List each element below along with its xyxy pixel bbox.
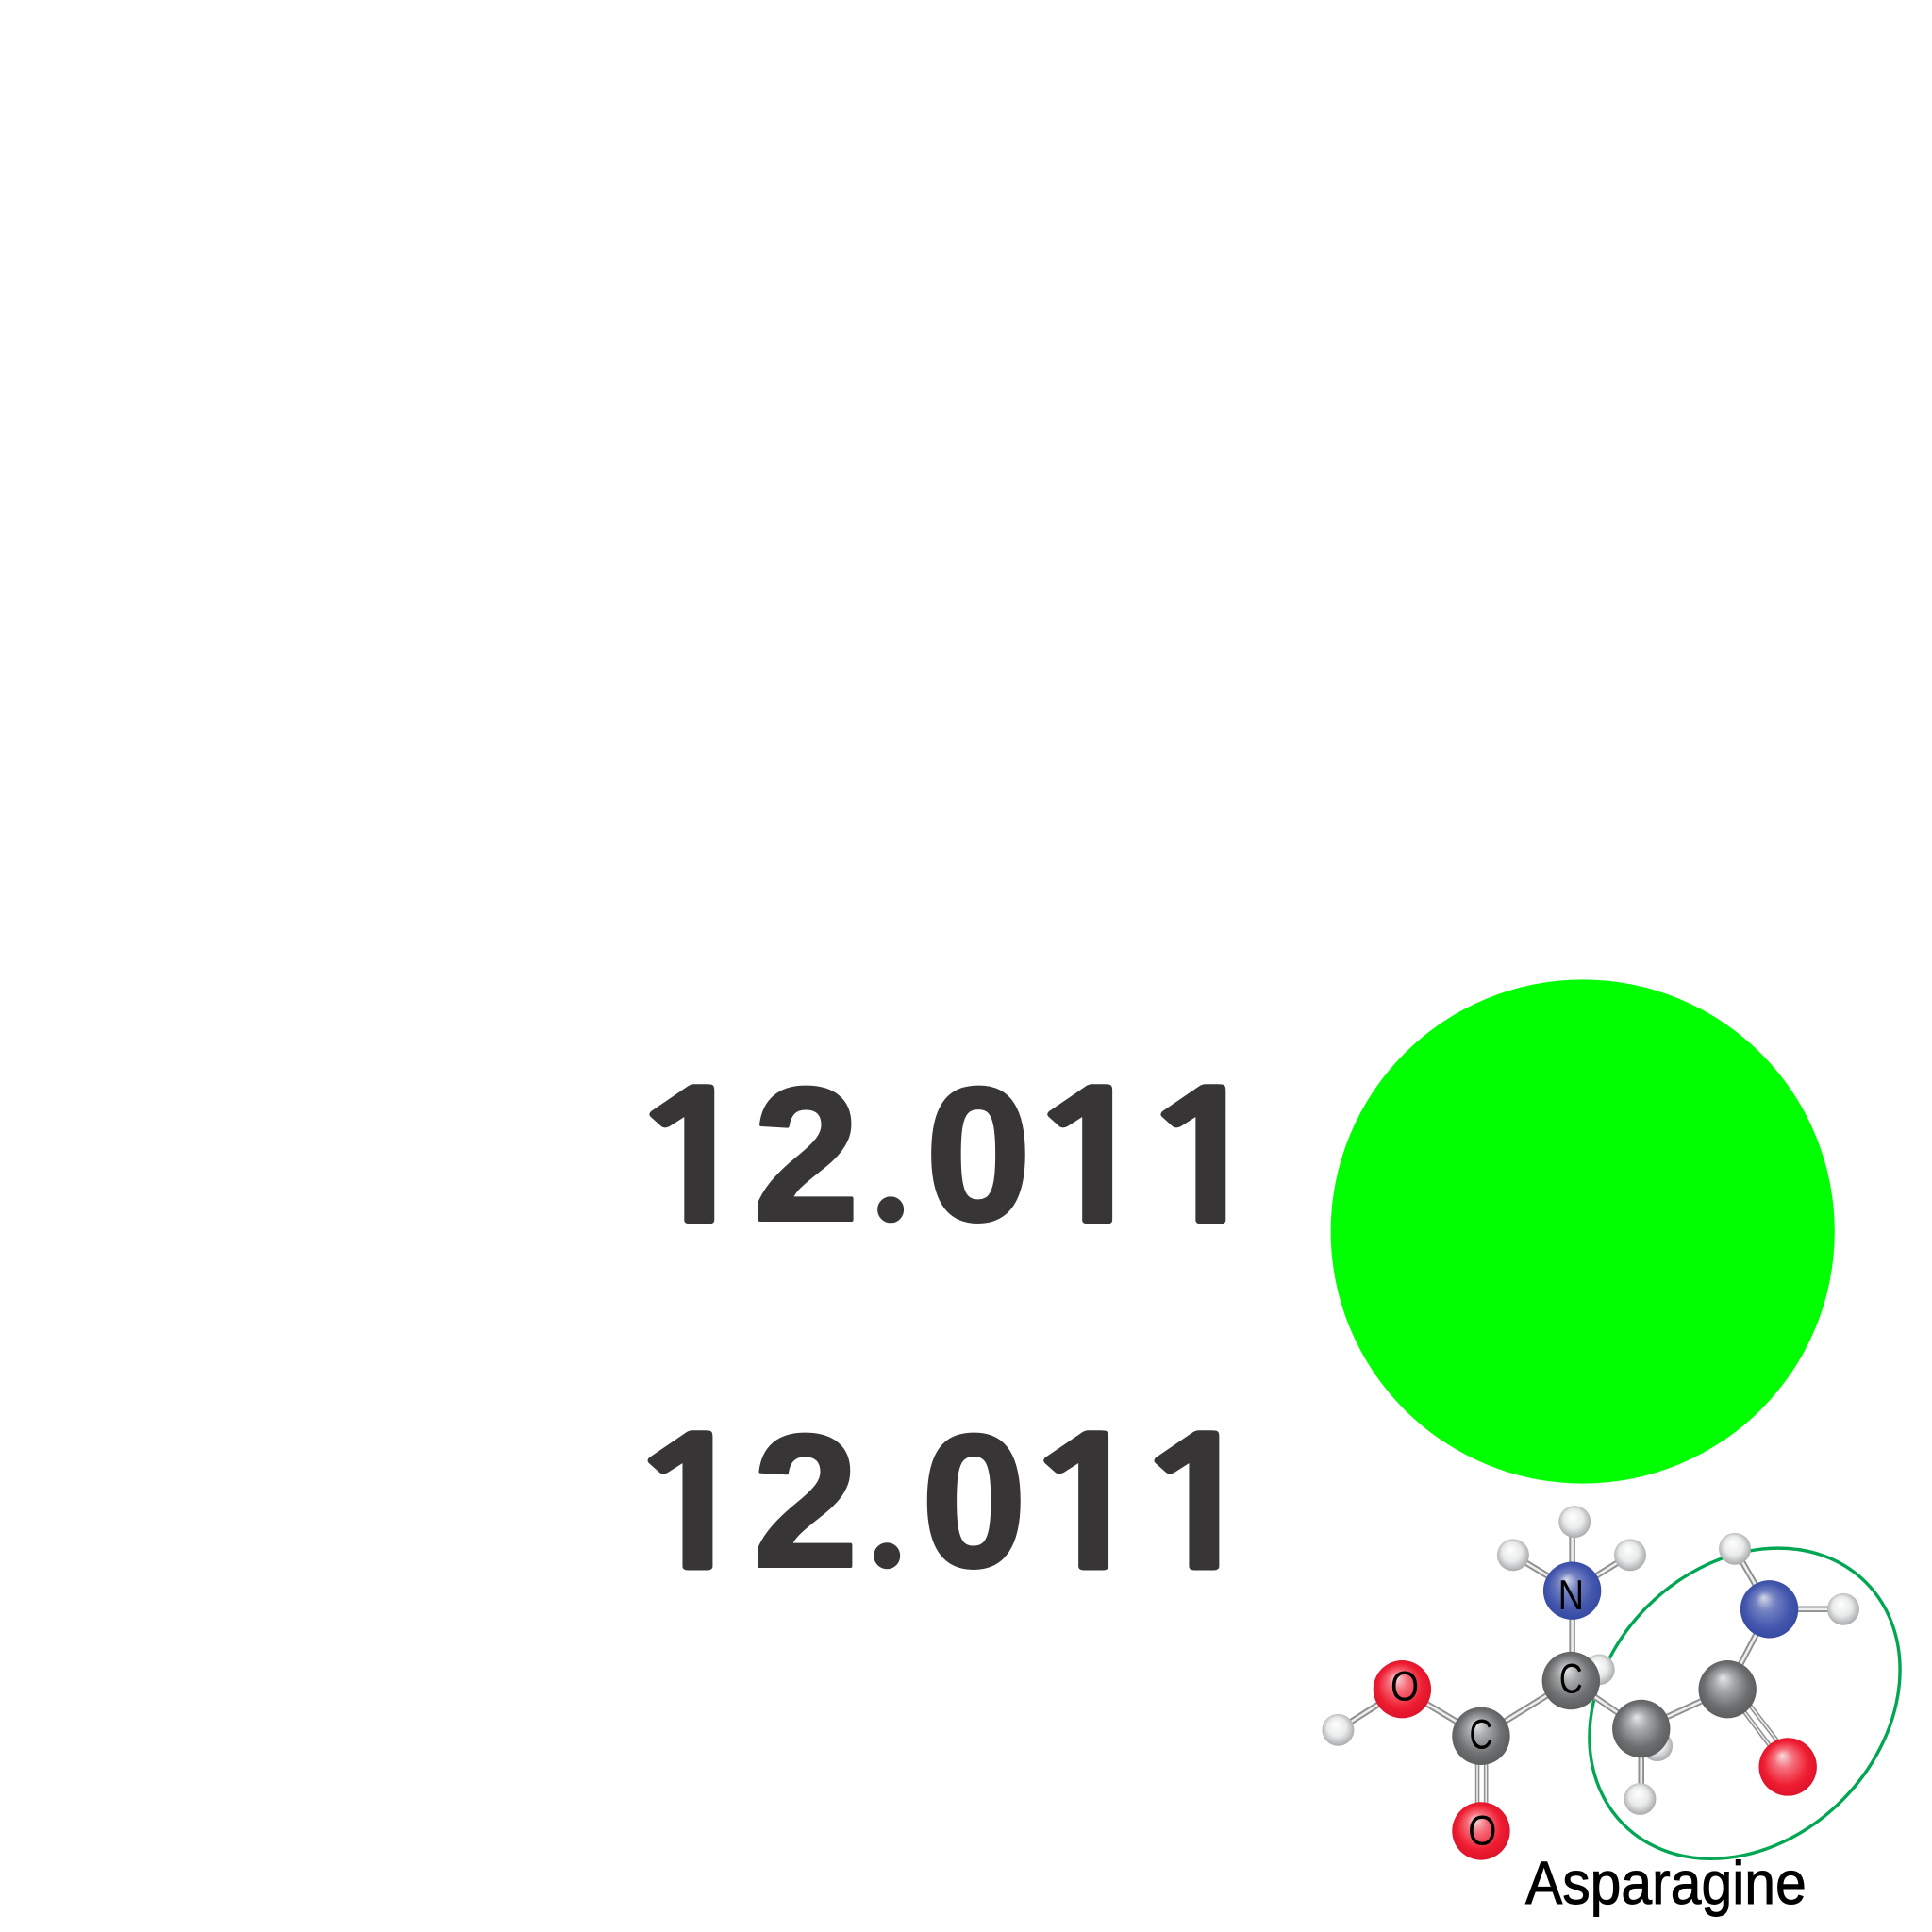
number: lower 12.011: 0 (922, 1396, 1026, 1607)
bonds (1338, 1522, 1843, 1831)
atom letters: O (1468, 1807, 1496, 1854)
atom letters (1391, 1573, 1584, 1854)
nitrogen atoms (1543, 1562, 1798, 1638)
number: lower 12.011: 1 (619, 1417, 766, 1595)
number: lower 12.011: 1 (1125, 1417, 1273, 1595)
number: upper 12.011: 1 (1018, 1071, 1165, 1249)
hydrogen atoms (1322, 1506, 1859, 1815)
atom letters: N (1558, 1573, 1584, 1619)
number: lower 12.011: . (859, 1413, 912, 1584)
number: lower 12.011: 2 (753, 1396, 858, 1607)
number: lower 12.011 (619, 1396, 1273, 1607)
number: upper 12.011: 1 (621, 1071, 768, 1249)
atom letters: O (1391, 1663, 1419, 1709)
number: upper 12.011 (621, 1048, 1279, 1260)
atom letters: C (1559, 1657, 1583, 1703)
side chain highlight ellipse (1526, 1485, 1932, 1922)
green circle (1331, 979, 1835, 1484)
number: lower 12.011: 1 (1014, 1417, 1161, 1595)
oxygen atoms (1374, 1660, 1817, 1860)
molecule name label: Asparagine (1525, 1849, 1807, 1917)
number: upper 12.011: 0 (925, 1048, 1031, 1260)
number: upper 12.011: 2 (754, 1048, 859, 1260)
carbon atoms (1452, 1652, 1757, 1765)
atom letters: C (1470, 1711, 1492, 1757)
number: upper 12.011: . (863, 1067, 916, 1238)
number: upper 12.011: 1 (1132, 1071, 1279, 1249)
molecule: asparagine ball-and-stick (1322, 1485, 1932, 1922)
